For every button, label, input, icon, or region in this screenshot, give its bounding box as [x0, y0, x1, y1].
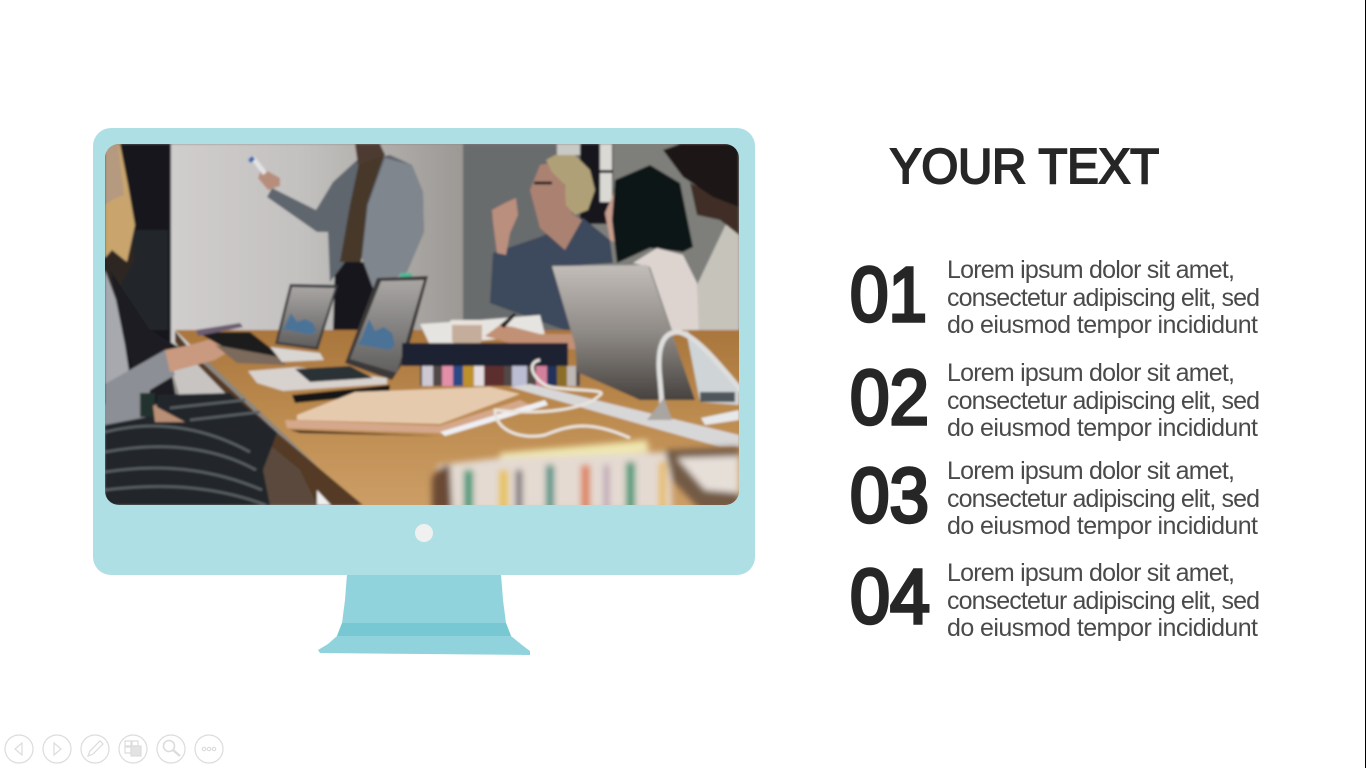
list item 02: [850, 355, 1260, 442]
icon: previous: [5, 735, 33, 763]
list item 01: 01: [850, 252, 927, 338]
man in checked shirt: [490, 218, 613, 333]
list item 01: consectetur adipiscing elit, sed: [947, 284, 1260, 312]
monitor: [93, 128, 755, 655]
person on the right: [696, 224, 739, 332]
silver laptop: [552, 265, 695, 400]
window: [557, 144, 581, 155]
list item 04: do eiusmod tempor incididunt: [947, 614, 1258, 642]
list item 01: Lorem ipsum dolor sit amet,: [947, 256, 1235, 284]
list item 02: 02: [850, 355, 929, 441]
monitor body: [93, 128, 755, 575]
list item 04: [850, 554, 1260, 642]
list item 02: Lorem ipsum dolor sit amet,: [947, 359, 1235, 387]
list item 03: consectetur adipiscing elit, sed: [947, 485, 1260, 513]
monitor power button: [415, 524, 433, 542]
large laptop: [248, 276, 428, 403]
small laptop: [270, 284, 338, 362]
back wall: [171, 144, 463, 354]
icon: zoom: [157, 735, 185, 763]
power strip and cables: [510, 384, 739, 447]
table top: [175, 330, 745, 510]
list item 03: [850, 453, 1260, 540]
floor and table leg: [172, 364, 226, 396]
list item 02: consectetur adipiscing elit, sed: [947, 387, 1260, 415]
monitor stand: [318, 574, 530, 655]
list item 03: Lorem ipsum dolor sit amet,: [947, 457, 1235, 485]
tablet in hand: [197, 332, 282, 357]
list item 01: [850, 252, 1260, 339]
folders: [285, 400, 530, 433]
list item 04: consectetur adipiscing elit, sed: [947, 587, 1260, 615]
icon: pen: [81, 735, 109, 763]
icon: next: [43, 735, 71, 763]
list item 03: do eiusmod tempor incididunt: [947, 512, 1258, 540]
list item 01: do eiusmod tempor incididunt: [947, 311, 1258, 339]
slideshow controls: [5, 735, 223, 763]
list item 04: Lorem ipsum dolor sit amet,: [947, 559, 1235, 587]
blurred foreground pencil case: [432, 440, 739, 510]
icon: slides: [119, 735, 147, 763]
photo: team meeting around a table: [100, 144, 745, 510]
list item 04: 04: [850, 554, 930, 640]
icon: more: [195, 735, 223, 763]
presenter: [333, 262, 378, 332]
list item 02: do eiusmod tempor incididunt: [947, 414, 1258, 442]
coffee cup and papers: [420, 315, 545, 345]
list item 03: 03: [850, 453, 929, 539]
binders: [402, 343, 568, 366]
woman with dark hair: [603, 192, 617, 243]
striped skirt: [105, 393, 277, 505]
table side: [175, 331, 363, 505]
seated woman: [105, 249, 134, 290]
title: YOUR TEXT: [890, 140, 1159, 194]
